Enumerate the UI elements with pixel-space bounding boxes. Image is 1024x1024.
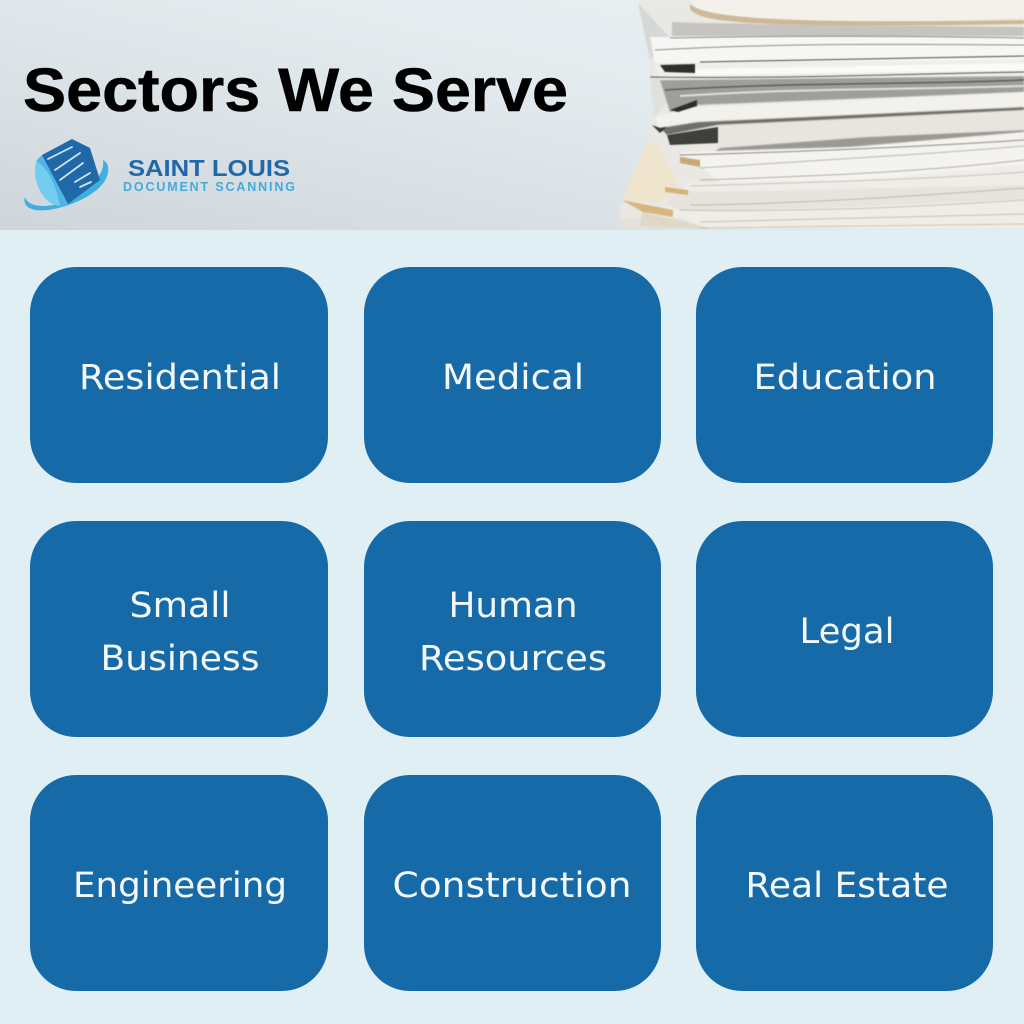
card: Education xyxy=(696,267,993,483)
card: Small Business: Small xyxy=(130,586,230,626)
card: Construction xyxy=(364,775,661,991)
logo name: SAINT LOUIS xyxy=(128,155,290,181)
card: Residential xyxy=(30,267,328,483)
card: Small Business xyxy=(30,521,328,737)
card: Education: Education xyxy=(754,358,936,398)
header banner xyxy=(0,0,1024,230)
card: Construction: Construction xyxy=(392,866,632,906)
card: Human Resources xyxy=(364,521,661,737)
card: Real Estate: Real Estate xyxy=(746,866,948,906)
card: Residential: Residential xyxy=(79,358,281,398)
icon: document with swoosh xyxy=(24,139,108,210)
logo tagline: DOCUMENT SCANNING xyxy=(123,180,295,194)
photo: stack of papers xyxy=(618,0,1024,229)
card: Legal xyxy=(696,521,993,737)
card: Real Estate xyxy=(696,775,993,991)
card: Medical: Medical xyxy=(442,358,584,398)
card: Legal: Legal xyxy=(800,612,894,652)
card: Small Business: Business xyxy=(100,639,260,679)
card: Human Resources: Resources xyxy=(419,639,607,679)
card: Engineering: Engineering xyxy=(73,866,287,906)
card: Medical xyxy=(364,267,661,483)
logo: Saint Louis Document Scanning xyxy=(24,139,295,210)
card: Engineering xyxy=(30,775,328,991)
card: Human Resources: Human xyxy=(448,586,578,626)
title: Sectors We Serve xyxy=(23,56,568,124)
